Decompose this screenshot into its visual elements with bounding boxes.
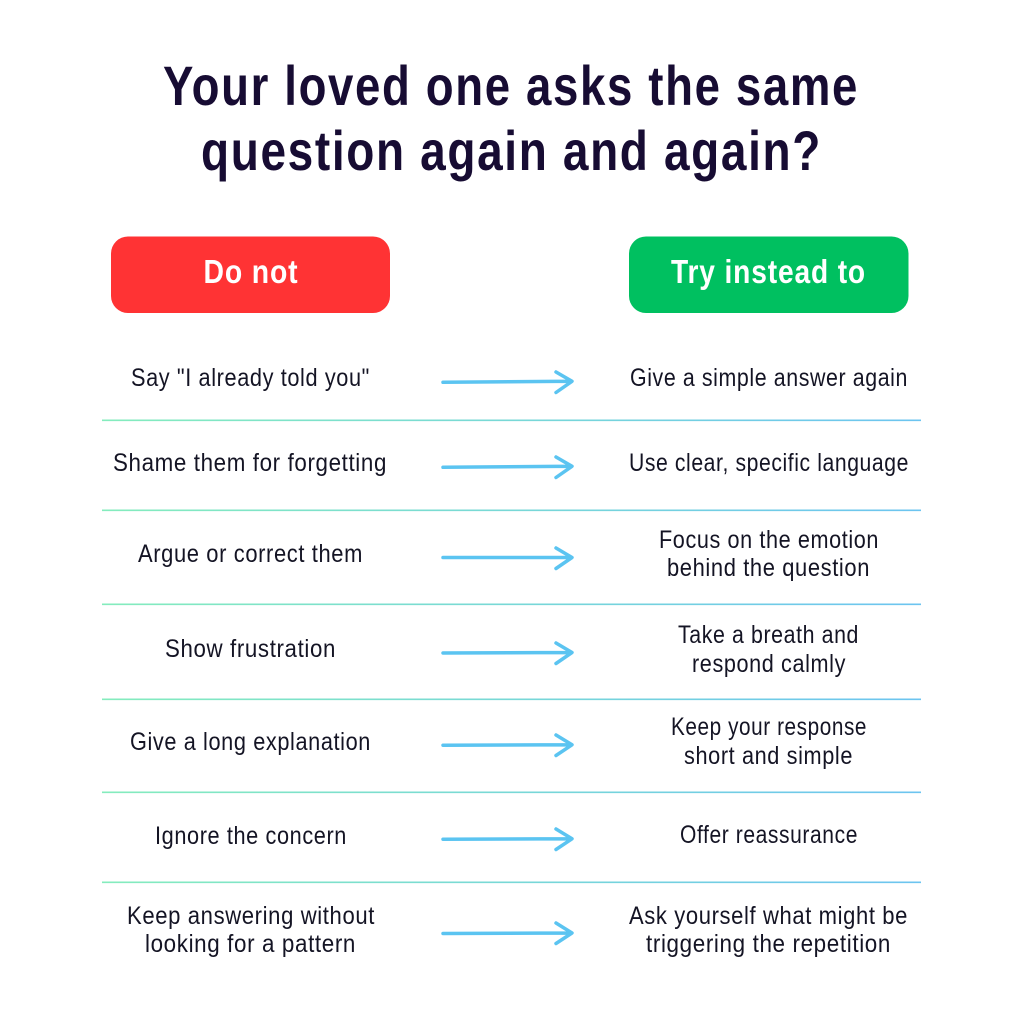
row 6: Offer reassurance bbox=[680, 821, 858, 849]
row 5: Give a long explanation bbox=[130, 728, 371, 756]
row 4 bbox=[165, 621, 859, 678]
row 4: respond calmly bbox=[692, 650, 846, 678]
row 7: looking for a pattern bbox=[145, 930, 356, 958]
panel: do not header: Do not bbox=[204, 253, 298, 290]
row 4: Show frustration bbox=[165, 635, 336, 663]
row 7: triggering the repetition bbox=[646, 930, 891, 958]
row 7: Keep answering without bbox=[127, 902, 375, 930]
row 6 bbox=[155, 821, 858, 850]
panel: try instead to header: Try instead to bbox=[671, 253, 866, 290]
row 3: behind the question bbox=[667, 554, 870, 582]
title: question again and again? bbox=[201, 119, 822, 182]
row 5 bbox=[130, 713, 867, 770]
row 6: Ignore the concern bbox=[155, 822, 347, 850]
row 3 bbox=[138, 526, 879, 582]
panel: do not header bbox=[111, 236, 390, 313]
row 1: Give a simple answer again bbox=[630, 364, 908, 392]
row 3: Argue or correct them bbox=[138, 540, 363, 568]
row 1 bbox=[131, 364, 908, 392]
row 7 bbox=[127, 902, 908, 958]
row 5: Keep your response bbox=[671, 713, 867, 741]
title bbox=[163, 54, 859, 182]
row 4: Take a breath and bbox=[678, 621, 859, 649]
row 7: Ask yourself what might be bbox=[629, 902, 908, 930]
row 3: Focus on the emotion bbox=[659, 526, 879, 554]
title: Your loved one asks the same bbox=[163, 54, 859, 117]
row 2: Shame them for forgetting bbox=[113, 449, 387, 477]
row 1: Say "I already told you" bbox=[131, 364, 370, 392]
panel: try instead to header bbox=[629, 236, 908, 313]
row 2 bbox=[113, 449, 909, 478]
row 2: Use clear, specific language bbox=[629, 449, 909, 477]
row 5: short and simple bbox=[684, 742, 853, 770]
